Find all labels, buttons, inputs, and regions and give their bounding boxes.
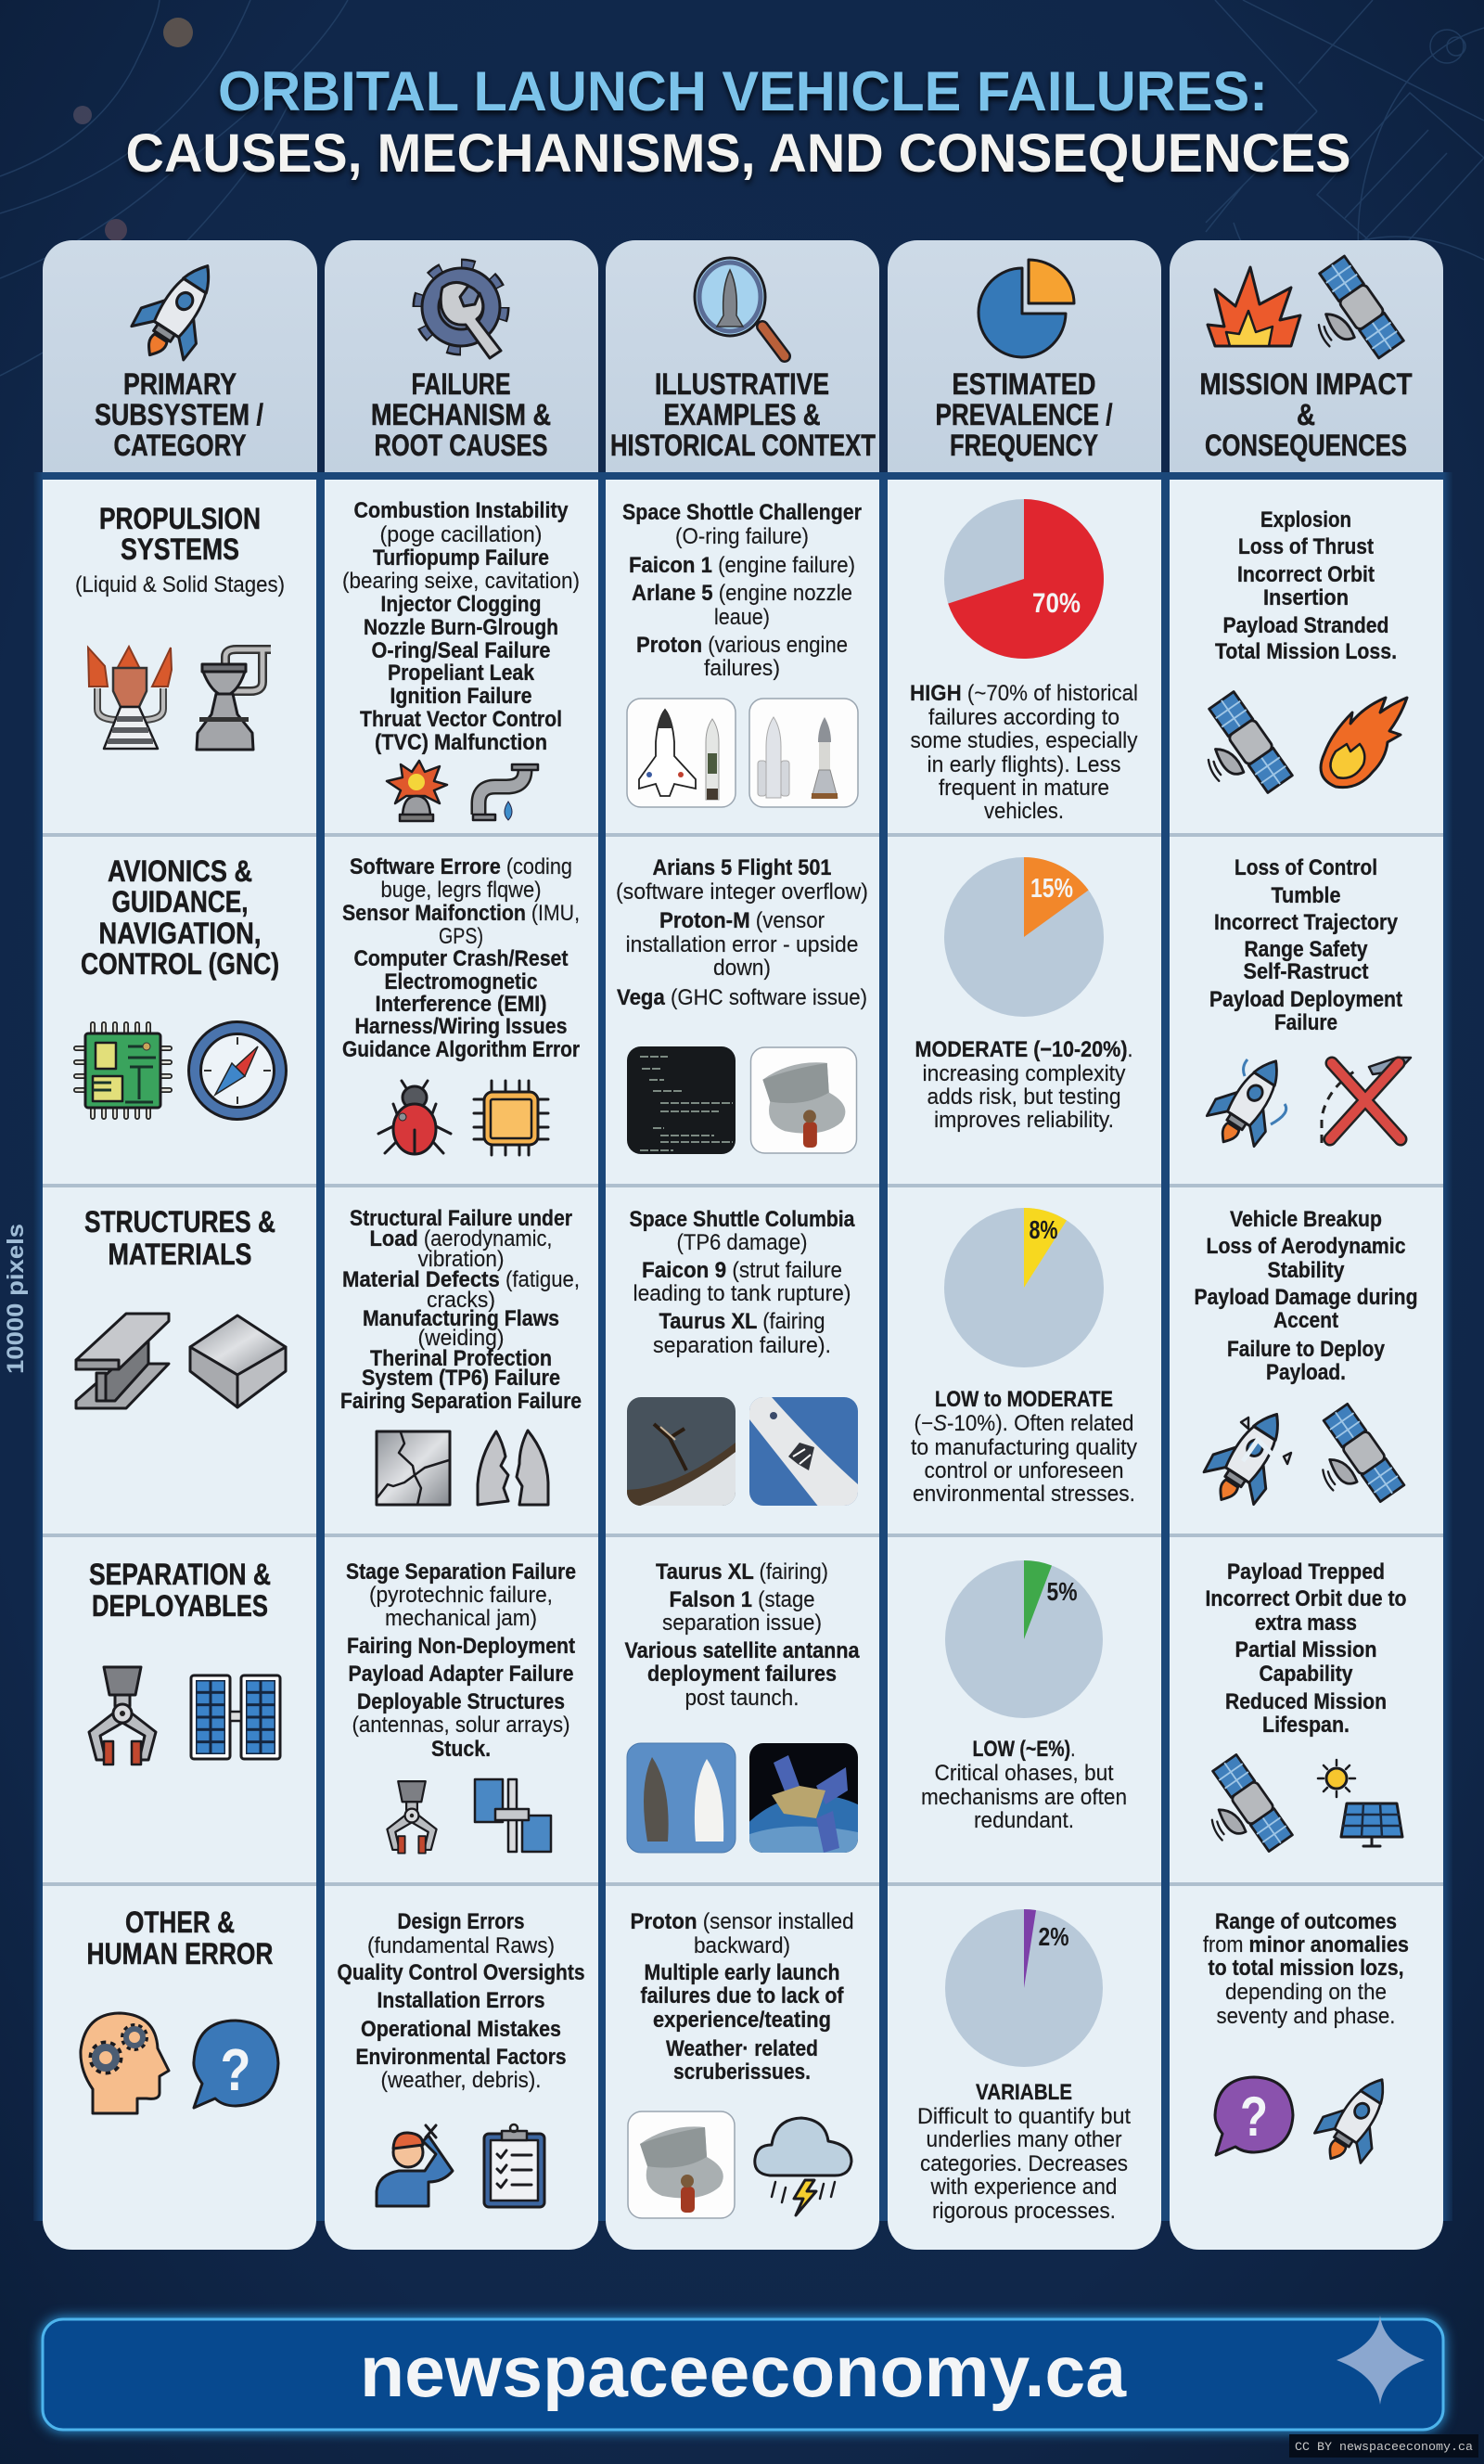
- prevalence text: [921, 1737, 1127, 1833]
- mechanism list: Therinal Profection: [370, 1346, 552, 1371]
- row 3 panel: structures category: [43, 1187, 316, 1534]
- impact list: Accent: [1273, 1308, 1338, 1333]
- heading: HUMAN ERROR: [87, 1937, 273, 1970]
- image: shuttle wing damage: [627, 1397, 736, 1506]
- table backing: [33, 472, 1452, 2221]
- mechanism list: (weather, debris).: [380, 2068, 542, 2093]
- row 1 panel: impact: [1170, 480, 1443, 833]
- examples list: Arlane 5 (engine nozzle: [632, 581, 852, 606]
- icon: satellite: [1319, 255, 1404, 359]
- mechanism list: Injector Clogging: [380, 592, 542, 617]
- heading: [81, 854, 279, 981]
- mechanism list: [342, 498, 580, 755]
- impact text: depending on the: [1225, 1980, 1387, 2005]
- pie chart 8%: 8%: [1030, 1215, 1058, 1244]
- icon: head with gears: [81, 2013, 169, 2113]
- mechanism list: Quality Control Oversights: [338, 1960, 584, 1985]
- icon: metal block: [190, 1315, 286, 1407]
- icon: liquid engine: [88, 647, 172, 749]
- examples list: backward): [694, 1933, 790, 1958]
- examples list: [629, 1207, 855, 1358]
- header text: CONSEQUENCES: [1205, 429, 1407, 462]
- impact list: Loss of Control: [1235, 855, 1377, 880]
- row 1 panel: failure mechanisms: [325, 480, 598, 833]
- mechanism list: Fairing Non-Deployment: [347, 1634, 575, 1659]
- row 5 panel: prevalence: [888, 1886, 1161, 2250]
- examples list: Taurus XL (fairing): [656, 1559, 828, 1585]
- icon: solar panel on stand: [1341, 1803, 1402, 1846]
- heading: NAVIGATION,: [98, 917, 262, 950]
- image: shuttle and rocket: [627, 699, 736, 807]
- icon: sun: [1318, 1760, 1355, 1797]
- icon: rocket: [1307, 2064, 1406, 2175]
- impact list: Stability: [1267, 1258, 1345, 1283]
- impact list: Loss of Aerodynamic: [1206, 1234, 1406, 1259]
- mechanism list: Structural Failure under: [350, 1206, 572, 1231]
- mechanism list: Stuck.: [431, 1737, 491, 1762]
- row 5 panel: impact: [1170, 1886, 1443, 2250]
- image: source code screen: [627, 1046, 736, 1154]
- row 2 panel: impact: [1170, 837, 1443, 1184]
- row 4 panel: prevalence: [888, 1537, 1161, 1882]
- mechanism list: Manufacturing Flaws: [363, 1306, 559, 1331]
- row 4 panel: impact: [1170, 1537, 1443, 1882]
- image: rocket strut: [749, 1397, 858, 1506]
- icon: circuit board: [76, 1024, 170, 1117]
- mechanism list: mechanical jam): [385, 1606, 537, 1631]
- icon: pie: [979, 260, 1074, 357]
- header text: HISTORICAL CONTEXT: [610, 429, 876, 462]
- row 5 panel: failure mechanisms: [325, 1886, 598, 2250]
- impact list: [1209, 855, 1402, 1035]
- icon: trajectory cross: [1322, 1058, 1411, 1143]
- mechanism list: vibration): [417, 1247, 505, 1272]
- impact list: Payload Stranded: [1222, 613, 1389, 638]
- mechanism list: [338, 1909, 584, 2093]
- examples list: installation error - upside: [625, 932, 859, 957]
- icon: broken rocket: [1196, 1397, 1303, 1517]
- prevalence text: Difficult to quantify but: [917, 2104, 1131, 2129]
- row 3 panel: prevalence: [888, 1187, 1161, 1534]
- mechanism list: Environmental Factors: [356, 2045, 566, 2070]
- image: fairing halves: [627, 1743, 736, 1853]
- prevalence text: mechanisms are often: [921, 1785, 1127, 1810]
- prevalence text: in early flights). Less: [928, 752, 1120, 777]
- header: mission impact: [1170, 240, 1443, 472]
- heading: [84, 1205, 275, 1271]
- impact list: [1195, 1207, 1417, 1385]
- mechanism list: Nozzle Burn-Glrough: [364, 615, 558, 640]
- mechanism list: [340, 1206, 582, 1414]
- impact list: Loss of Thrust: [1238, 534, 1374, 559]
- examples list: Space Shuttle Columbia: [629, 1207, 855, 1232]
- row 2 panel: prevalence: [888, 837, 1161, 1184]
- header text: CATEGORY: [113, 429, 247, 462]
- icon: fireball: [1321, 698, 1407, 788]
- mechanism list: [346, 1559, 576, 1762]
- icon: cracked panel: [377, 1431, 450, 1505]
- header text: PRIMARY: [123, 367, 237, 401]
- impact list: Incorrect Trajectory: [1214, 910, 1399, 935]
- icon: magnifier: [695, 258, 785, 356]
- icon: damaged satellite: [1209, 691, 1293, 793]
- row 3 panel: impact: [1170, 1187, 1443, 1534]
- impact text: Range of outcomes: [1215, 1909, 1397, 1934]
- mechanism list: (TVC) Malfunction: [375, 730, 547, 755]
- mechanism list: Payload Adapter Failure: [349, 1662, 573, 1687]
- image: launch vehicles: [749, 699, 858, 807]
- impact list: Payload Damage during: [1195, 1285, 1417, 1310]
- impact list: Capability: [1260, 1662, 1353, 1687]
- prevalence text: increasing complexity: [922, 1061, 1126, 1086]
- prevalence text: LOW (~E%).: [972, 1737, 1076, 1762]
- examples list: Taurus XL (fairing: [659, 1309, 825, 1334]
- impact list: Incorrect Orbit due to: [1206, 1586, 1406, 1611]
- mechanism list: (antennas, solur arrays): [352, 1713, 569, 1738]
- pie chart 8%: [944, 1208, 1104, 1367]
- mechanism list: Operational Mistakes: [361, 2017, 561, 2042]
- examples list: (O-ring failure): [675, 524, 809, 549]
- header text: ESTIMATED: [952, 367, 1096, 401]
- header text: FAILURE: [412, 367, 510, 401]
- heading: (Liquid & Solid Stages): [75, 572, 285, 597]
- examples list: Proton (sensor installed: [631, 1909, 853, 1934]
- icon: storm cloud: [755, 2118, 851, 2215]
- row 5 panel: examples: [606, 1886, 879, 2250]
- header: illustrative examples: [606, 240, 879, 472]
- icon: explosion: [1208, 267, 1300, 346]
- icon: question bubble: ?: [221, 2036, 250, 2103]
- icon: solid engine: [197, 649, 271, 750]
- examples list: [631, 1909, 853, 2085]
- row 3 panel: failure mechanisms: [325, 1187, 598, 1534]
- examples list: Proton-M (vensor: [659, 908, 825, 933]
- mechanism list: Installation Errors: [377, 1988, 545, 2013]
- mechanism list: cracks): [427, 1288, 495, 1313]
- prevalence text: [910, 681, 1138, 824]
- prevalence text: (−S-10%). Often related: [915, 1411, 1133, 1436]
- prevalence text: to manufacturing quality: [911, 1435, 1137, 1460]
- prevalence text: some studies, especially: [911, 728, 1137, 753]
- examples list: down): [713, 956, 771, 981]
- mechanism list: GPS): [439, 924, 483, 949]
- footer banner: [43, 2316, 1443, 2430]
- icon: engine explosion: [387, 761, 447, 821]
- prevalence text: MODERATE (−10-20%).: [915, 1037, 1133, 1062]
- impact list: Total Mission Loss.: [1215, 639, 1397, 664]
- icon: purple question bubble: [1215, 2077, 1293, 2155]
- website url: newspaceeconomy.ca: [360, 2330, 1127, 2412]
- impact list: Explosion: [1260, 507, 1351, 533]
- heading: OTHER &: [125, 1906, 235, 1939]
- icon: tumbling rocket: [1198, 1045, 1300, 1158]
- impact list: Self-Rastruct: [1243, 959, 1369, 984]
- icon: stuck solar array: [475, 1779, 551, 1852]
- mechanism list: System (TP6) Failure: [362, 1366, 560, 1391]
- mechanism list: (fundamental Raws): [367, 1933, 555, 1958]
- image: satellite over Earth: [749, 1743, 858, 1853]
- heading: [89, 1558, 271, 1623]
- title: [126, 60, 1350, 184]
- heading: AVIONICS &: [108, 854, 252, 888]
- header text: ILLUSTRATIVE: [655, 367, 829, 401]
- row 4 panel: separation category: [43, 1537, 316, 1882]
- impact list: Insertion: [1263, 585, 1349, 610]
- examples list: post taunch.: [684, 1686, 800, 1711]
- impact list: Payload.: [1266, 1360, 1346, 1385]
- impact list: Failure: [1274, 1010, 1337, 1035]
- icon: I-beam: [76, 1314, 169, 1408]
- heading: [87, 1906, 273, 1970]
- mechanism list: Interference (EMI): [375, 992, 547, 1017]
- examples list: Faicon 1 (engine failure): [629, 553, 855, 578]
- prevalence text: categories. Decreases: [920, 2151, 1128, 2176]
- mechanism list: (poge cacillation): [380, 522, 542, 547]
- prevalence text: frequent in mature: [939, 776, 1109, 801]
- examples list: [625, 1559, 860, 1711]
- mechanism list: Sensor Maifonction (IMU,: [342, 901, 580, 926]
- icon: rocket: [122, 249, 235, 373]
- mechanism list: Turfiopump Failure: [373, 545, 549, 571]
- impact list: Range Safety: [1245, 937, 1368, 962]
- icon: sparkle: [1337, 2316, 1425, 2405]
- impact list: extra mass: [1255, 1611, 1357, 1636]
- mechanism list: (weiding): [417, 1326, 505, 1351]
- examples list: leading to tank rupture): [633, 1281, 851, 1306]
- title: ORBITAL LAUNCH VEHICLE FAILURES:: [218, 60, 1268, 122]
- header text: FREQUENCY: [950, 429, 1098, 462]
- icon: leaking pipe: [473, 764, 538, 820]
- examples list: Arians 5 Flight 501: [653, 855, 831, 880]
- icon: compass: [195, 1028, 280, 1113]
- pie chart 2%: 2%: [1039, 1922, 1069, 1951]
- examples list: deployment failures: [647, 1662, 837, 1687]
- icon: clamp: [387, 1781, 437, 1854]
- header text: EXAMPLES &: [664, 398, 820, 431]
- examples list: scruberissues.: [673, 2060, 811, 2085]
- row 5 panel: other category: [43, 1886, 316, 2250]
- header text: [1200, 367, 1413, 462]
- header text: [371, 367, 551, 462]
- examples list: separation failure).: [653, 1333, 831, 1358]
- heading: SEPARATION &: [89, 1558, 271, 1591]
- impact list: Incorrect Orbit: [1237, 562, 1375, 587]
- heading: MATERIALS: [108, 1238, 252, 1271]
- header text: [610, 367, 876, 462]
- heading: SYSTEMS: [121, 533, 239, 566]
- examples list: Vega (GHC software issue): [617, 985, 867, 1010]
- examples list: Falson 1 (stage: [670, 1587, 814, 1612]
- icon: bug: [378, 1081, 451, 1154]
- examples list: Weather· related: [666, 2036, 818, 2061]
- header: estimated prevalence: [888, 240, 1161, 472]
- mechanism list: buge, legrs flqwe): [380, 878, 542, 903]
- prevalence text: [917, 2080, 1131, 2224]
- pie chart 15%: 15%: [1030, 874, 1073, 904]
- header text: SUBSYSTEM /: [95, 398, 263, 431]
- mechanism list: Combustion Instability: [354, 498, 569, 523]
- watermark: [1289, 2434, 1478, 2458]
- icon: clipboard: [484, 2124, 544, 2207]
- mechanism list: Thruat Vector Control: [360, 707, 562, 732]
- row 3 panel: examples: [606, 1187, 879, 1534]
- heading: CONTROL (GNC): [81, 947, 279, 981]
- heading: [75, 502, 285, 597]
- header text: [935, 367, 1113, 462]
- mechanism list: Deployable Structures: [357, 1689, 565, 1714]
- icon: solar panels: [191, 1675, 280, 1759]
- mechanism list: Software Errore (coding: [350, 854, 572, 879]
- impact list: Reduced Mission: [1225, 1689, 1387, 1714]
- examples list: separation issue): [662, 1611, 822, 1636]
- heading: GUIDANCE,: [111, 885, 249, 918]
- icon: question bubble: [194, 2021, 278, 2108]
- row 1 panel: prevalence: [888, 480, 1161, 833]
- prevalence text: adds risk, but testing: [928, 1084, 1120, 1110]
- mechanism list: Fairing Separation Failure: [340, 1389, 582, 1414]
- impact text: from minor anomalies: [1203, 1932, 1409, 1957]
- icon: purple question bubble: ?: [1240, 2085, 1268, 2148]
- prevalence text: Critical ohases, but: [935, 1761, 1114, 1786]
- mechanism list: Load (aerodynamic,: [369, 1226, 553, 1251]
- header: failure mechanism: [325, 240, 598, 472]
- impact text: seventy and phase.: [1217, 2004, 1395, 2029]
- examples list: [622, 500, 862, 681]
- icon: microchip: [474, 1081, 548, 1155]
- prevalence text: HIGH (~70% of historical: [910, 681, 1138, 706]
- header text: &: [1297, 398, 1315, 431]
- examples list: Proton (various engine: [636, 633, 848, 658]
- impact list: Tumble: [1271, 883, 1341, 908]
- prevalence text: with experience and: [930, 2175, 1117, 2200]
- image: sensor part: [750, 1047, 857, 1153]
- examples list: [616, 855, 868, 1010]
- prevalence text: control or unforeseen: [924, 1458, 1124, 1483]
- mechanism list: Material Defects (fatigue,: [342, 1267, 580, 1292]
- mechanism list: O-ring/Seal Failure: [371, 638, 551, 663]
- icon: gear and wrench: [420, 266, 502, 358]
- mechanism list: Ignition Failure: [390, 684, 532, 709]
- impact list: Vehicle Breakup: [1230, 1207, 1382, 1232]
- examples list: Space Shottle Challenger: [622, 500, 862, 525]
- header text: ROOT CAUSES: [375, 429, 547, 462]
- heading: DEPLOYABLES: [92, 1589, 268, 1623]
- icon: satellite: [1212, 1754, 1293, 1852]
- header text: MISSION IMPACT: [1200, 367, 1413, 401]
- pie chart 70%: 70%: [1032, 588, 1081, 619]
- header text: PREVALENCE /: [935, 398, 1113, 431]
- header text: [95, 367, 263, 462]
- examples list: experience/teating: [653, 2008, 831, 2033]
- header text: MECHANISM &: [371, 398, 551, 431]
- examples list: Various satellite antanna: [625, 1638, 860, 1663]
- examples list: (TP6 damage): [677, 1230, 807, 1255]
- row 2 panel: failure mechanisms: [325, 837, 598, 1184]
- row 4 panel: failure mechanisms: [325, 1537, 598, 1882]
- prevalence text: [915, 1037, 1133, 1133]
- image: sensor part: [628, 2111, 735, 2218]
- icon: satellite: [1323, 1404, 1405, 1502]
- examples list: leaue): [714, 605, 770, 630]
- mechanism list: (bearing seixe, cavitation): [342, 569, 580, 594]
- prevalence text: environmental stresses.: [913, 1482, 1135, 1507]
- prevalence text: failures according to: [928, 705, 1119, 730]
- icon: clamp: [89, 1667, 156, 1765]
- prevalence text: improves reliability.: [934, 1108, 1114, 1133]
- impact list: Payload Deployment: [1209, 987, 1402, 1012]
- row 4 panel: examples: [606, 1537, 879, 1882]
- mechanism list: [342, 854, 580, 1062]
- header: primary subsystem: [43, 240, 317, 472]
- prevalence text: rigorous processes.: [932, 2199, 1116, 2224]
- examples list: failures): [704, 656, 780, 681]
- title: CAUSES, MECHANISMS, AND CONSEQUENCES: [126, 123, 1350, 184]
- watermark: CC BY newspaceeconomy.ca: [1295, 2440, 1473, 2454]
- impact list: Payload Trepped: [1227, 1559, 1385, 1585]
- prevalence text: redundant.: [974, 1808, 1074, 1833]
- mechanism list: Electromognetic: [384, 969, 538, 995]
- pie chart 70%: [944, 499, 1104, 659]
- icon: split fairing: [478, 1431, 548, 1505]
- impact list: [1206, 1559, 1406, 1738]
- heading: PROPULSION: [99, 502, 261, 535]
- mechanism list: Computer Crash/Reset: [354, 946, 569, 971]
- prevalence text: LOW to MODERATE: [935, 1387, 1113, 1412]
- prevalence text: VARIABLE: [976, 2080, 1072, 2105]
- row 2 panel: examples: [606, 837, 879, 1184]
- pie chart 5%: 5%: [1046, 1577, 1078, 1606]
- icon: confused worker: [377, 2125, 453, 2206]
- prevalence text: underlies many other: [926, 2127, 1122, 2152]
- examples list: (software integer overflow): [616, 879, 868, 905]
- row 1 panel: propulsion category: [43, 480, 316, 833]
- impact list: Partial Mission: [1235, 1637, 1376, 1662]
- impact text: to total mission lozs,: [1208, 1956, 1404, 1981]
- mechanism list: Guidance Algorithm Error: [342, 1037, 580, 1062]
- impact text: [1203, 1909, 1409, 2029]
- mechanism list: Harness/Wiring Issues: [354, 1014, 568, 1039]
- examples list: Faicon 9 (strut failure: [642, 1258, 842, 1283]
- prevalence text: [911, 1387, 1137, 1507]
- heading: STRUCTURES &: [84, 1205, 275, 1238]
- examples list: Multiple early launch: [644, 1960, 840, 1985]
- pie chart 15%: [944, 857, 1104, 1017]
- impact list: [1215, 507, 1397, 664]
- prevalence text: vehicles.: [984, 799, 1064, 824]
- impact list: Lifespan.: [1262, 1713, 1350, 1738]
- row 1 panel: examples: [606, 480, 879, 833]
- pie chart 2%: [945, 1909, 1103, 2067]
- row 2 panel: avionics category: [43, 837, 316, 1184]
- pie chart 5%: [945, 1560, 1103, 1718]
- mechanism list: Propeliant Leak: [388, 661, 535, 686]
- impact list: Failure to Deploy: [1227, 1337, 1386, 1362]
- mechanism list: Design Errors: [397, 1909, 525, 1934]
- side label: 10000 pixels: [3, 1224, 29, 1374]
- examples list: failures due to lack of: [640, 1983, 844, 2008]
- mechanism list: Stage Separation Failure: [346, 1559, 576, 1585]
- mechanism list: (pyrotechnic failure,: [369, 1583, 553, 1608]
